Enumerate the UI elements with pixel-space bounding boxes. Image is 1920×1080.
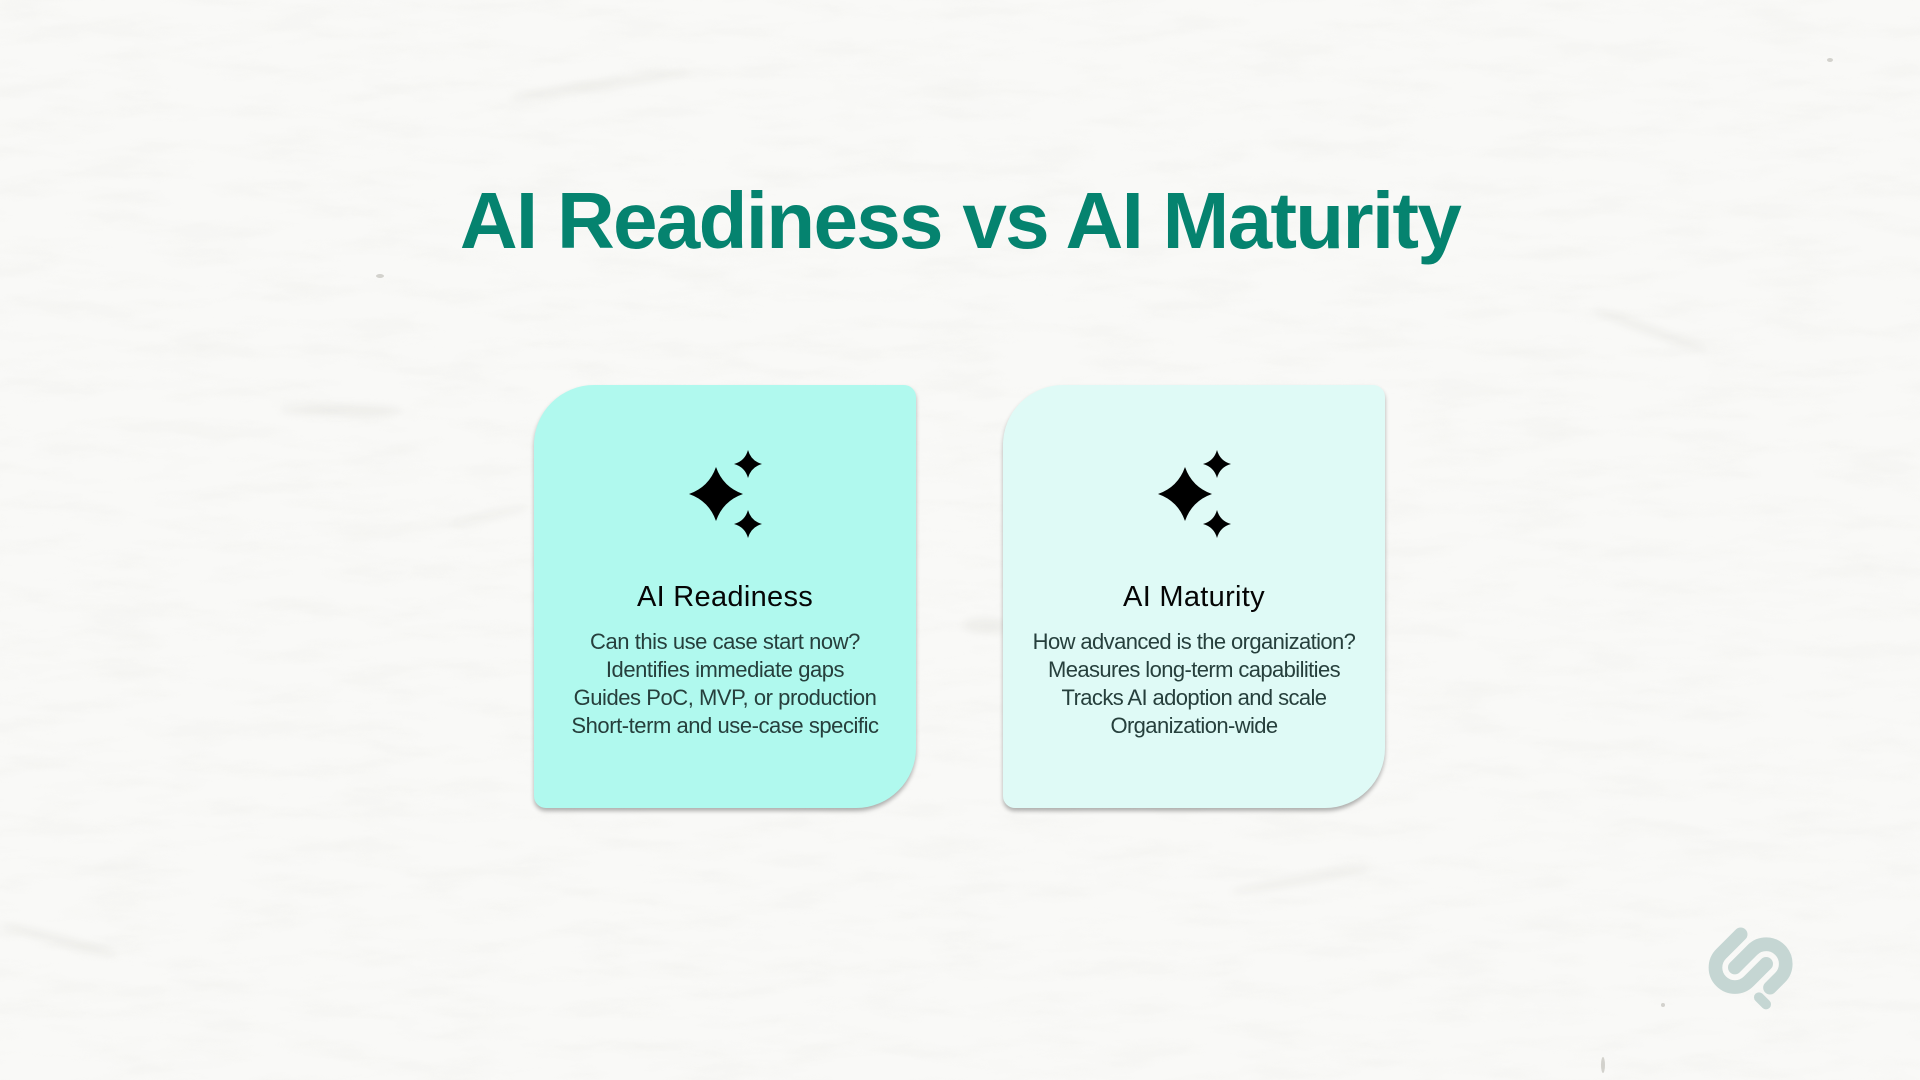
heading: AI Maturity: AI Maturity [1123,581,1265,613]
text: AI Maturity points: Organization-wide [1110,713,1278,738]
text: AI Readiness points [571,629,879,738]
text: AI Maturity points [1033,629,1355,738]
text: AI Readiness points: Identifies immediate gaps [606,657,844,682]
panel: AI Maturity [1003,385,1385,808]
heading: AI Readiness: AI Readiness [637,581,813,613]
text: AI Readiness points: Short-term and use-case specific [571,713,879,738]
panel: AI Readiness [534,385,916,808]
text: AI Maturity points: Tracks AI adoption and scale [1062,685,1326,710]
text: AI Maturity points: How advanced is the organization? [1033,629,1355,654]
text: AI Readiness points: Can this use case start now? [590,629,860,654]
icon: sparkles [689,450,762,538]
icon: sparkles [1158,450,1231,538]
icon: logo [1708,928,1792,1010]
text: AI Readiness points: Guides PoC, MVP, or production [574,685,876,710]
text: AI Maturity points: Measures long-term capabilities [1048,657,1340,682]
title: AI Readiness vs AI Maturity [460,176,1460,265]
